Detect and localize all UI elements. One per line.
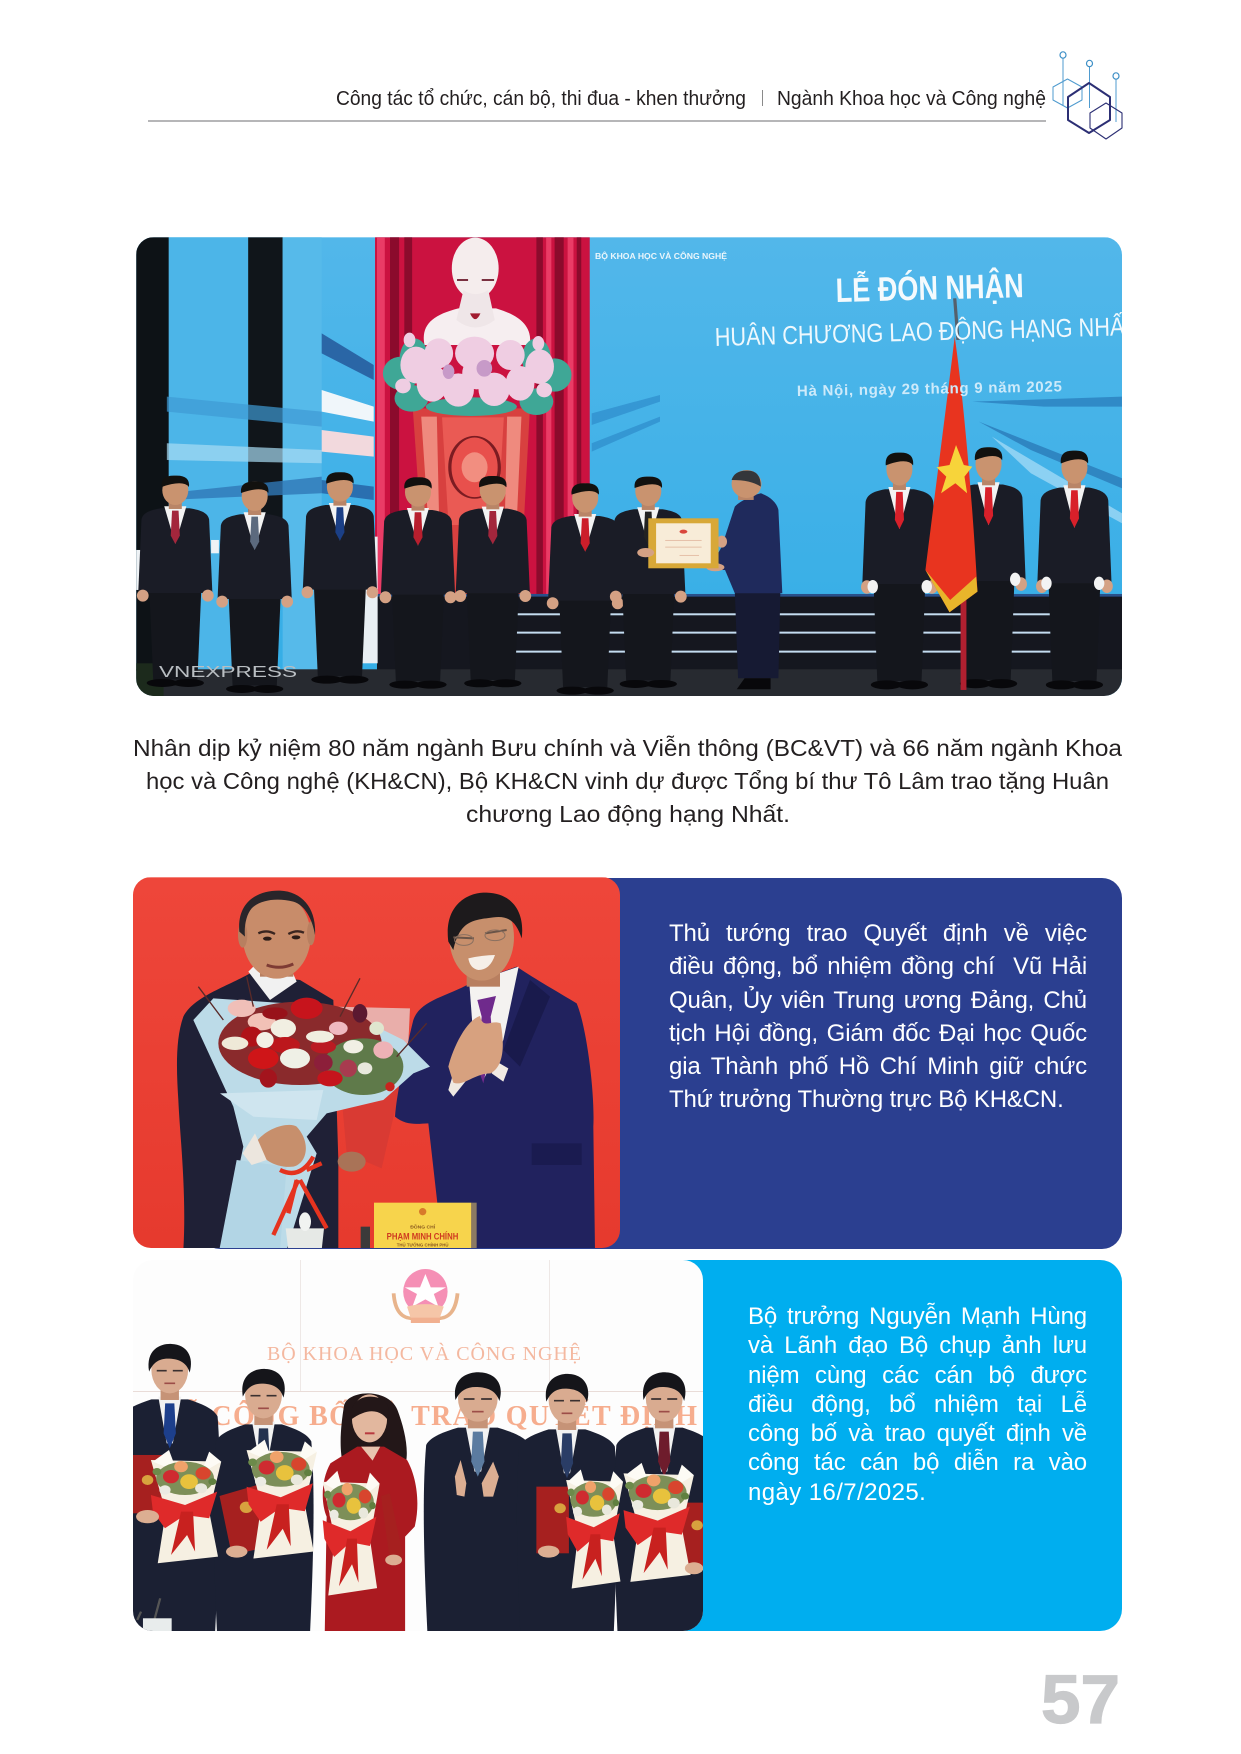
caption: first photo — [133, 735, 1123, 827]
officials — [133, 1344, 703, 1631]
caption: first photo: chương Lao động hạng Nhất. — [466, 801, 790, 827]
caption: first photo: học và Công nghệ (KH&CN), Bộ KH&CN vinh dự được Tổng bí thư Tô Lâm trao tặng Huân — [146, 768, 1109, 794]
document — [342, 1044, 408, 1168]
backdrop title: BỘ KHOA HỌC VÀ CÔNG NGHỆ — [267, 1341, 581, 1365]
name placard: PHẠM MINH CHÍNH — [387, 1230, 458, 1241]
teacup — [286, 1228, 324, 1250]
photo watermark: VNEXPRESS — [159, 664, 297, 681]
text block: navy panel caption — [669, 920, 1087, 1113]
text block: cyan panel caption: công tác cán bộ diễn ra vào — [748, 1449, 1087, 1476]
text block: navy panel caption: gia Thành phố Hồ Chí Minh giữ chức — [669, 1053, 1087, 1080]
woman in red ao dai — [323, 1393, 417, 1633]
name placard — [374, 1203, 477, 1249]
certificate — [637, 518, 719, 568]
backdrop emblem — [394, 1269, 458, 1323]
guards — [861, 447, 1113, 689]
header text: sector name: Ngành Khoa học và Công nghệ — [777, 87, 1046, 110]
text block: navy panel caption: Thủ tướng trao Quyết định về việc — [669, 920, 1087, 947]
text block: cyan panel caption: công bố và trao quyết định về — [748, 1420, 1087, 1447]
text block: cyan panel caption: điều động, bổ nhiệm tại Lễ — [748, 1391, 1087, 1418]
stage screen title: LỄ ĐÓN NHẬN — [835, 267, 1024, 310]
text block: navy panel caption: Thứ trưởng Thường trực Bộ KH&CN. — [669, 1086, 1064, 1113]
name placard: THỦ TƯỚNG CHÍNH PHỦ — [397, 1243, 449, 1248]
photo: award ceremony on stage — [136, 237, 1138, 697]
hands on folders — [136, 1510, 703, 1574]
panel: cyan caption background — [190, 1260, 1122, 1631]
stage and floor — [377, 595, 1125, 671]
hand holding folder — [338, 1152, 366, 1172]
bust — [424, 308, 530, 345]
flowers — [383, 338, 572, 416]
icon: hexagon molecule — [1053, 52, 1122, 139]
ribbon — [273, 1157, 327, 1235]
text block: cyan panel caption — [748, 1302, 1087, 1506]
minister's clapping hands — [455, 1460, 499, 1497]
bouquets — [151, 1440, 694, 1595]
row of officials — [137, 472, 687, 695]
photo: minister with appointed officials — [133, 1260, 703, 1631]
name placard: ĐỒNG CHÍ — [410, 1222, 436, 1230]
text block: navy panel caption: điều động, bổ nhiệm đồng chí Vũ Hải — [669, 953, 1087, 980]
header: running title and page icon — [148, 52, 1122, 139]
text block: cyan panel caption: và Lãnh đạo Bộ chụp ảnh lưu — [748, 1332, 1087, 1359]
stage screen date: Hà Nội, ngày 29 tháng 9 năm 2025 — [797, 378, 1062, 400]
panel: navy caption background — [200, 878, 1122, 1249]
left man — [177, 891, 338, 1250]
right man — [395, 893, 595, 1250]
header text: section title: Công tác tổ chức, cán bộ, thi đua - khen thưởng — [336, 87, 746, 110]
caption: first photo: Nhân dịp kỷ niệm 80 năm ngành Bưu chính và Viễn thông (BC&VT) và 66 năm ngành Khoa — [133, 735, 1123, 761]
text block: cyan panel caption: ngày 16/7/2025. — [748, 1479, 926, 1506]
text block: cyan panel caption: Bộ trưởng Nguyễn Mạnh Hùng — [748, 1303, 1087, 1330]
flag — [925, 298, 977, 690]
text block: navy panel caption: tịch Hội đồng, Giám đốc Đại học Quốc — [669, 1020, 1087, 1047]
stage screen organiser: BỘ KHOA HỌC VÀ CÔNG NGHỆ — [595, 250, 727, 261]
bouquet — [193, 977, 430, 1250]
stage screen subtitle: HUÂN CHƯƠNG LAO ĐỘNG HẠNG NHẤT — [714, 311, 1138, 352]
vase — [413, 408, 530, 594]
microphones — [136, 1598, 162, 1620]
presenter — [706, 470, 782, 689]
text block: navy panel caption: Quân, Ủy viên Trung ương Đảng, Chủ — [669, 987, 1087, 1014]
curtain — [375, 237, 590, 594]
backdrop event line: LỄ CÔNG BỐ VÀ TRAO QUYẾT ĐỊNH — [163, 1400, 697, 1432]
text block: cyan panel caption: niệm cùng các cán bộ được — [748, 1362, 1087, 1389]
photo: Prime Minister presenting decision — [133, 877, 620, 1250]
folders — [133, 1455, 704, 1569]
page number: 57 — [1041, 1661, 1120, 1738]
